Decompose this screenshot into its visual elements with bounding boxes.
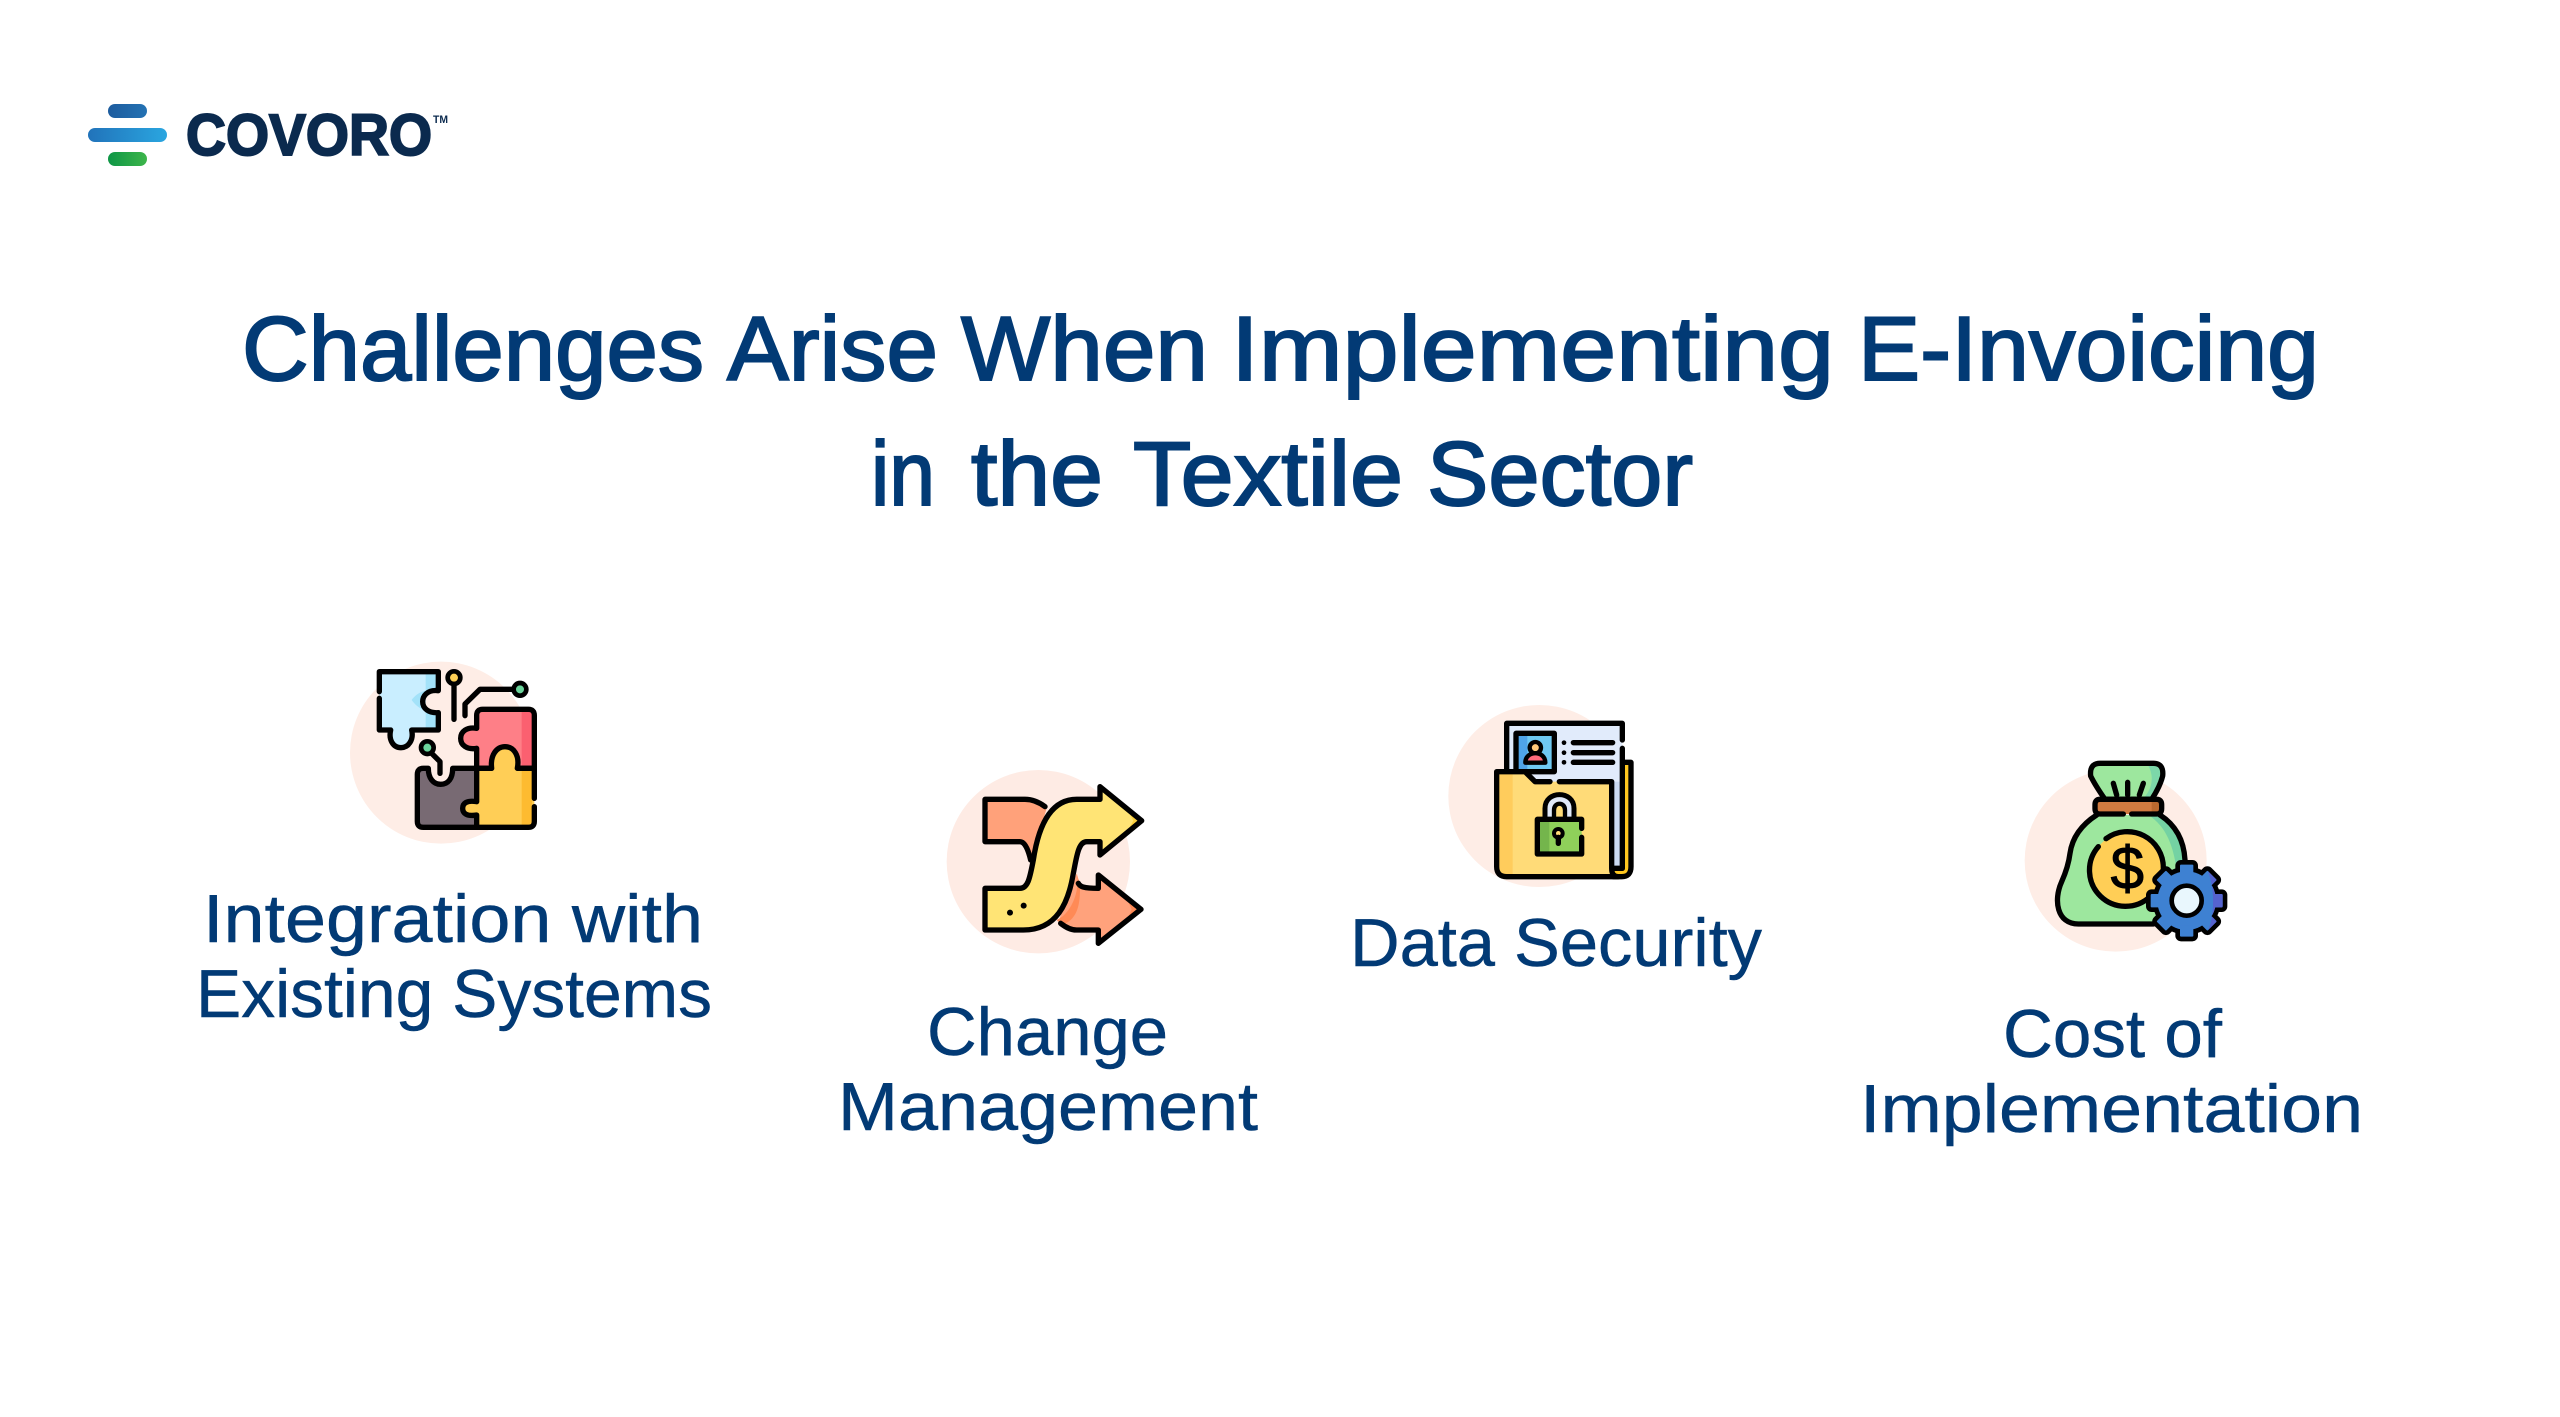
icon: puzzle pieces — [350, 662, 534, 844]
title: Challenges — [242, 299, 704, 400]
title: When — [961, 299, 1208, 400]
title: Sector — [1427, 424, 1693, 525]
icon: money bag with gear — [2025, 763, 2223, 952]
label: Implementation — [1860, 1071, 2363, 1147]
label: Cost of — [2003, 996, 2222, 1072]
label: Integration with — [203, 881, 703, 957]
panel: cost of implementation — [1860, 763, 2363, 1147]
logo: Covoro — [88, 103, 448, 168]
logo wordmark: COVORO — [186, 103, 432, 168]
label — [1860, 996, 2363, 1147]
icon: crossing arrows — [947, 770, 1142, 953]
label: Data Security — [1350, 905, 1762, 981]
label: Existing Systems — [196, 956, 712, 1032]
label — [838, 994, 1258, 1145]
panel: change management — [838, 770, 1258, 1145]
title: Implementing — [1231, 299, 1834, 400]
label: Change — [927, 994, 1168, 1070]
title: Arise — [727, 299, 938, 400]
logo mark: three bars — [88, 104, 167, 166]
label — [196, 881, 712, 1032]
panel: data security — [1350, 705, 1762, 981]
icon: secure folder — [1448, 705, 1631, 887]
dollar sign: $ — [2111, 834, 2144, 901]
title — [242, 299, 2319, 525]
title: Textile — [1133, 424, 1403, 525]
panel: integration with existing systems — [196, 662, 712, 1032]
title: in — [871, 424, 935, 525]
trademark: TM — [433, 114, 448, 126]
label: Management — [838, 1069, 1258, 1145]
title: the — [971, 424, 1103, 525]
title: E-Invoicing — [1858, 299, 2319, 400]
